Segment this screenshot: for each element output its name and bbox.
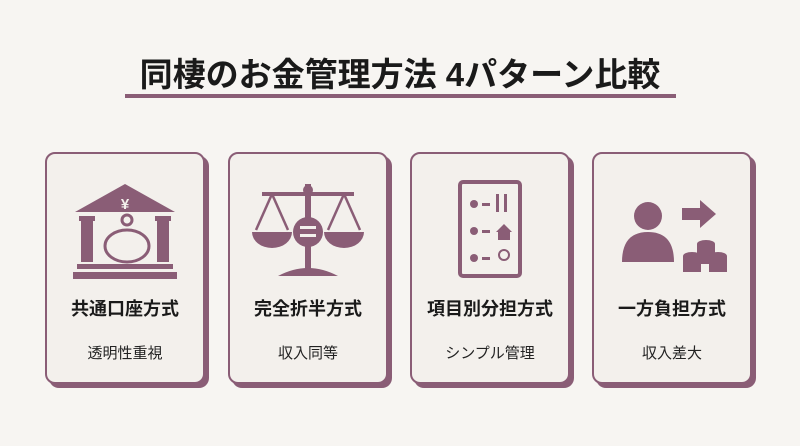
icon: scale <box>252 184 364 276</box>
title: 同棲のお金管理方法 4パターン比較 <box>140 56 660 93</box>
icon: checklist <box>458 180 522 278</box>
panel: item split <box>410 152 570 384</box>
panel: one-side: 一方負担方式 <box>618 299 726 319</box>
panel: equal split: 収入同等 <box>278 345 338 362</box>
panel: one-side <box>592 152 752 384</box>
panel: one-side: 収入差大 <box>642 345 702 362</box>
label: 共通口座方式 <box>71 299 179 319</box>
icon: person coins <box>622 200 727 272</box>
panel: joint account: 透明性重視 <box>87 345 162 362</box>
panel: joint account <box>45 152 205 384</box>
icon: bank piggy <box>73 184 177 279</box>
panel: equal split: 完全折半方式 <box>254 299 362 319</box>
panel: equal split <box>228 152 388 384</box>
panel: item split: シンプル管理 <box>445 345 535 362</box>
panel: item split: 項目別分担方式 <box>427 299 553 319</box>
icon: bank piggy: ¥ <box>121 196 130 213</box>
